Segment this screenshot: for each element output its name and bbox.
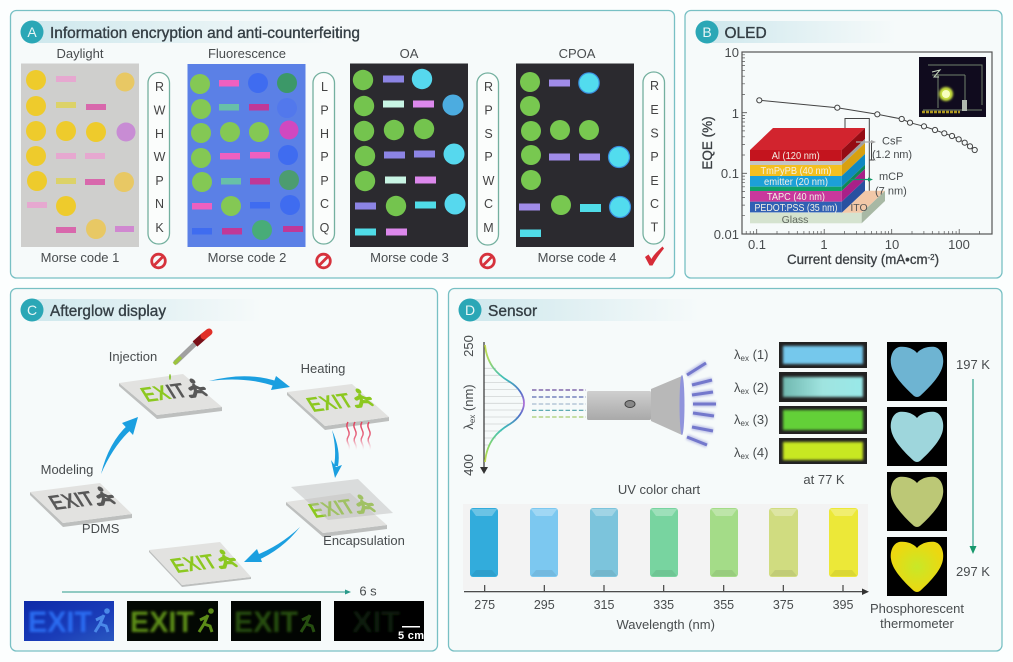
- panel B: OLED: [685, 10, 1002, 278]
- heading C: Afterglow display: [50, 303, 166, 320]
- icon: prohibited 3: [481, 254, 494, 268]
- step: modeling: Modeling: [41, 462, 93, 477]
- wavelength axis: 395: [833, 598, 853, 612]
- arrow: heating to encapsulation: [331, 430, 342, 478]
- letter pill 2: L: [321, 80, 328, 94]
- glass and ITO: ITO: [850, 202, 868, 214]
- photo: fluorescence: [188, 46, 306, 247]
- letter pill 3: S: [484, 127, 493, 141]
- y axis title: EQE (%): [700, 116, 715, 170]
- callout: CsF: [856, 136, 912, 161]
- afterglow photo 4 with scale bar: XIT: [352, 606, 400, 639]
- layer PEDOT:PSS: PEDOT:PSS (35 nm): [754, 202, 838, 214]
- inset: device photo: [919, 57, 986, 117]
- step: modeling: [30, 462, 132, 536]
- letter pill 4: E: [650, 174, 659, 188]
- afterglow photo 1: [24, 601, 114, 641]
- arrow: modeling to injection: [101, 417, 138, 474]
- EQE line chart: [700, 45, 992, 267]
- letter pill 2: P: [320, 150, 329, 164]
- y axis tick labels: 0.1: [721, 166, 739, 181]
- letter pill 1: W: [154, 150, 166, 164]
- afterglow photo 1: EXIT: [28, 606, 92, 639]
- wavelength axis: 275: [474, 598, 495, 612]
- layer emitter: emitter (20 nm): [764, 176, 828, 188]
- timeline arrow: [62, 584, 377, 598]
- color bars: [470, 508, 858, 577]
- photo: daylight: Daylight: [57, 46, 104, 61]
- wavelength axis: 315: [594, 598, 614, 612]
- excitation labels: [734, 347, 768, 461]
- excitation labels: λ: [734, 347, 740, 362]
- excitation labels: ex: [740, 419, 749, 428]
- step: injection: EXIT: [136, 379, 192, 407]
- y axis tick labels: 1: [732, 106, 739, 121]
- y axis tick labels: 10: [725, 45, 739, 60]
- afterglow photo 2: [127, 601, 218, 641]
- light rays glow: [687, 363, 716, 445]
- label: morse code 4: Morse code 4: [538, 250, 616, 265]
- x axis title: -2: [928, 253, 935, 262]
- layer PEDOT:PSS: [750, 180, 865, 214]
- x axis title: Current density (mA•cm: [787, 252, 930, 267]
- label: morse code 2: Morse code 2: [208, 250, 286, 265]
- temperature arrow: 297 K: [956, 564, 990, 579]
- excitation labels: λ: [734, 445, 740, 460]
- afterglow photo 3: EXIT: [234, 606, 298, 639]
- callout: mCP: (7 nm): [875, 186, 907, 198]
- wavelength axis: 295: [534, 598, 555, 612]
- letter pill 4: [643, 72, 664, 244]
- excitation labels: ex: [740, 387, 749, 396]
- letter pill 1: W: [154, 104, 166, 118]
- temperature arrow: 197 K: [956, 357, 990, 372]
- heading A: A: [27, 24, 37, 40]
- letter pill 2: [313, 72, 334, 244]
- step: finished device: [149, 542, 251, 587]
- icon: heat waves: [347, 422, 370, 450]
- arrow: encapsulation to final: [244, 527, 300, 562]
- heading D: [458, 298, 700, 322]
- icon: red check: [645, 246, 664, 266]
- heading B: OLED: [724, 25, 767, 42]
- letter pill 1: R: [155, 80, 164, 94]
- letter pill 2: H: [320, 127, 329, 141]
- letter pill 3: W: [483, 174, 495, 188]
- dashed wavelength lines: [532, 390, 586, 417]
- excitation labels: ex: [740, 354, 749, 363]
- step: finished device: EXIT: [166, 550, 222, 578]
- heading D: D: [465, 302, 475, 318]
- layer TmPyPB: [750, 143, 865, 177]
- heading C: C: [27, 302, 37, 318]
- x axis title: ): [935, 252, 939, 267]
- temperature arrow: [956, 357, 990, 579]
- arrow: injection to heating: [209, 376, 290, 390]
- afterglow photo 3: [231, 601, 321, 641]
- x axis tick labels: 1: [820, 237, 828, 252]
- letter pill 4: T: [651, 220, 659, 234]
- letter pill 1: [148, 72, 170, 244]
- y axis tick labels: [714, 45, 739, 242]
- icon: prohibited 2: [317, 254, 330, 268]
- step: modeling: PDMS: [82, 521, 120, 536]
- callout: CsF: CsF: [882, 136, 902, 148]
- x axis tick labels: 10: [885, 237, 899, 252]
- photo: OA: OA: [400, 46, 419, 61]
- letter pill 3: P: [484, 104, 493, 118]
- layer CsF: [750, 139, 865, 165]
- letter pill 1: P: [155, 174, 164, 188]
- 77 K sample strips: at 77 K: [803, 472, 845, 487]
- photo: CPOA: CPOA: [559, 46, 596, 61]
- wavelength axis: 375: [773, 598, 794, 612]
- letter pill 2: C: [320, 197, 329, 211]
- letter pill 4: E: [650, 103, 659, 117]
- afterglow photo 4 with scale bar: [334, 601, 424, 642]
- label: morse code 1: Morse code 1: [41, 250, 119, 265]
- label: phosphorescent thermometer: Phosphorescent: [870, 601, 964, 616]
- letter pill 3: R: [484, 80, 493, 94]
- wavelength axis: 335: [653, 598, 674, 612]
- x axis tick labels: 100: [948, 237, 970, 252]
- letter pill 2: Q: [320, 221, 330, 235]
- excitation labels: λ: [734, 412, 740, 427]
- callout: CsF: (1.2 nm): [872, 149, 912, 161]
- layer mCP: [750, 165, 865, 191]
- excitation labels: ex: [740, 452, 749, 461]
- layer Al: [750, 128, 865, 162]
- panel C: afterglow display: [10, 288, 438, 651]
- excitation spectrum: 250: [461, 335, 476, 357]
- letter pill 3: M: [483, 221, 494, 235]
- step: heating: Heating: [301, 361, 345, 376]
- photo: daylight: [21, 46, 139, 247]
- callout: mCP: mCP: [879, 171, 903, 183]
- letter pill 1: H: [155, 127, 164, 141]
- letter pill 3: P: [484, 150, 493, 164]
- letter pill 3: C: [484, 197, 493, 211]
- callout: mCP: [850, 171, 907, 198]
- wavelength axis: 355: [713, 598, 734, 612]
- letter pill 4: R: [650, 79, 659, 93]
- step: heating: [287, 361, 389, 450]
- data series: [757, 98, 977, 153]
- icon: UV flashlight: [587, 363, 716, 445]
- excitation spectrum: 400: [461, 454, 476, 476]
- step: modeling: EXIT: [44, 487, 100, 515]
- light rays core: [687, 363, 716, 445]
- letter pill 2: P: [320, 104, 329, 118]
- letter pill 4: C: [650, 197, 659, 211]
- step: injection: Injection: [109, 349, 157, 364]
- excitation labels: (1): [749, 347, 768, 362]
- device stack: [750, 118, 912, 226]
- afterglow photo 2: EXIT: [130, 606, 194, 639]
- layer TAPC: TAPC (40 nm): [767, 191, 825, 203]
- icon: prohibited 1: [152, 254, 165, 268]
- glass and ITO: [750, 191, 885, 226]
- heading A: Information encryption and anti-counterfeiting: [50, 25, 360, 42]
- photo: CPOA: [516, 46, 634, 247]
- layer TAPC: [750, 169, 865, 203]
- step: injection: [109, 332, 222, 419]
- letter pill 4: S: [650, 126, 659, 140]
- wavelength axis: Wavelength (nm): [616, 617, 715, 632]
- excitation labels: (4): [749, 445, 768, 460]
- 77 K sample strips: [779, 342, 867, 487]
- wavelength axis: [464, 585, 869, 632]
- layer Al: Al (120 nm): [772, 150, 820, 162]
- excitation spectrum: ex: [468, 415, 477, 423]
- photo: OA: [350, 46, 468, 247]
- letter pill 2: P: [320, 174, 329, 188]
- heading B: [696, 20, 897, 44]
- UV color chart: [463, 482, 869, 632]
- x axis tick labels: [748, 237, 970, 252]
- x axis tick labels: 0.1: [748, 237, 766, 252]
- step: encapsulation: Encapsulation: [323, 533, 405, 548]
- step: encapsulation: EXIT: [304, 495, 360, 523]
- heading C: [20, 298, 262, 322]
- letter pill 3: [477, 73, 498, 245]
- glass and ITO: Glass: [782, 214, 808, 226]
- heading A: [20, 20, 360, 44]
- step: heating: EXIT: [302, 389, 358, 417]
- label: phosphorescent thermometer: thermometer: [880, 616, 955, 631]
- layer emitter: [750, 154, 865, 188]
- label: phosphorescent thermometer: [870, 601, 964, 631]
- step: encapsulation: [286, 479, 405, 548]
- excitation labels: (2): [749, 380, 768, 395]
- label: morse code 3: Morse code 3: [370, 250, 449, 265]
- phosphorescent hearts: [887, 342, 947, 596]
- y axis tick labels: 0.01: [714, 227, 739, 242]
- timeline arrow: 6 s: [359, 584, 377, 598]
- excitation labels: λ: [734, 380, 740, 395]
- UV color chart: UV color chart: [618, 482, 701, 497]
- excitation spectrum: (nm): [461, 384, 476, 415]
- heading D: Sensor: [488, 303, 537, 320]
- layer TmPyPB: TmPyPB (40 nm): [760, 165, 832, 177]
- panel D: sensor: [448, 288, 1002, 651]
- wire: [845, 118, 869, 199]
- heading B: B: [702, 24, 712, 40]
- excitation spectrum: λ: [461, 423, 476, 430]
- panel A: information encryption and anti-counterfeiting: [10, 10, 674, 278]
- photo: fluorescence: Fluorescence: [208, 46, 286, 61]
- letter pill 4: P: [650, 150, 659, 164]
- icon: dropper: [169, 332, 209, 380]
- excitation labels: (3): [749, 412, 768, 427]
- letter pill 1: N: [155, 197, 164, 211]
- excitation spectrum: [461, 335, 524, 476]
- letter pill 1: K: [155, 221, 164, 235]
- afterglow photo 4 with scale bar: 5 cm: [398, 630, 424, 642]
